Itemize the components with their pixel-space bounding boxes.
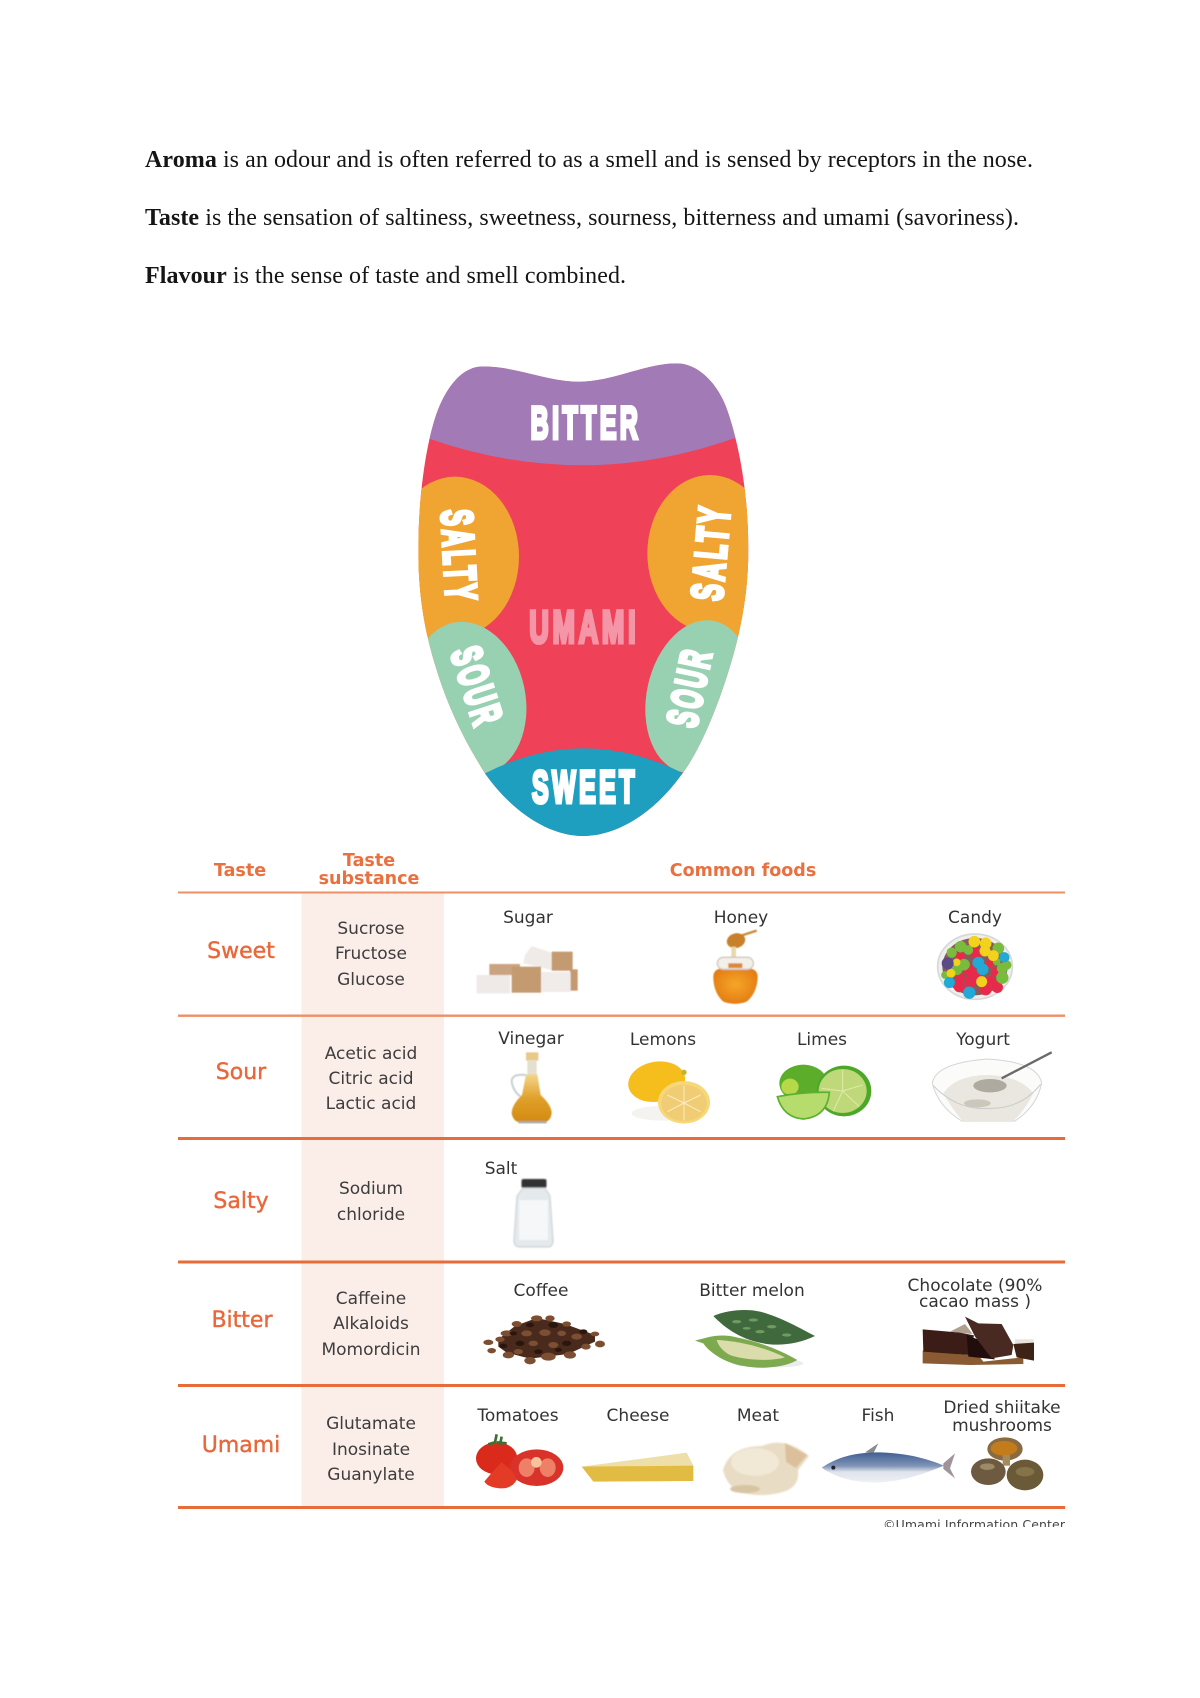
header: taste substance: Taste bbox=[343, 851, 395, 871]
header: common foods: Common foods bbox=[670, 861, 816, 881]
icon: vinegar bottle bbox=[512, 1052, 552, 1123]
label: sour left: SOUR bbox=[441, 641, 512, 734]
icon: meat bbox=[723, 1443, 809, 1495]
substances: sweet: Glucose bbox=[337, 970, 405, 990]
food label: yogurt: Yogurt bbox=[955, 1030, 1010, 1050]
icon: honey jar bbox=[713, 931, 758, 1004]
label: umami: UMAMI bbox=[529, 602, 639, 653]
food label: limes: Limes bbox=[797, 1030, 847, 1050]
food label: chocolate: Chocolate (90% bbox=[908, 1276, 1042, 1296]
row: sour bbox=[216, 1029, 1052, 1124]
substances: sour: Lactic acid bbox=[326, 1094, 416, 1114]
food label: honey: Honey bbox=[714, 908, 768, 928]
source credit: ©Umami Information Center bbox=[883, 1517, 1066, 1532]
substances: salty: Sodium bbox=[339, 1179, 403, 1199]
icon: salt shaker bbox=[514, 1179, 553, 1247]
label: bitter: BITTER bbox=[531, 398, 641, 449]
substances: sour: Acetic acid bbox=[325, 1044, 417, 1064]
food label: chocolate: cacao mass ) bbox=[919, 1292, 1031, 1312]
header: taste: Taste bbox=[214, 861, 266, 881]
substances: umami: Glutamate bbox=[326, 1414, 416, 1434]
food label: candy: Candy bbox=[948, 908, 1002, 928]
icon: bitter melon bbox=[695, 1310, 815, 1368]
icon: limes bbox=[777, 1065, 871, 1119]
row: sweet bbox=[207, 908, 1012, 1004]
food label: meat: Meat bbox=[737, 1406, 779, 1426]
icon: sugar cubes bbox=[477, 946, 578, 993]
label: salty right: SALTY bbox=[683, 502, 740, 602]
tongue map diagram bbox=[418, 363, 748, 836]
food label: vinegar: Vinegar bbox=[498, 1029, 564, 1049]
food label: salt: Salt bbox=[485, 1159, 518, 1179]
panel: definitions bbox=[145, 147, 1033, 289]
row label: bitter: Bitter bbox=[211, 1308, 273, 1333]
row label: salty: Salty bbox=[213, 1189, 269, 1214]
icon: fish bbox=[822, 1443, 955, 1482]
row label: sour: Sour bbox=[216, 1060, 267, 1085]
text: aroma definition: Aroma is an odour and is often referred to as a smell and is sensed by receptors in the nose. bbox=[145, 147, 1033, 173]
icon: coffee beans bbox=[483, 1315, 605, 1364]
substances: sweet: Sucrose bbox=[337, 919, 405, 939]
food label: bitter melon: Bitter melon bbox=[699, 1281, 805, 1301]
row: umami bbox=[202, 1398, 1061, 1495]
text: flavour definition: Flavour is the sense of taste and smell combined. bbox=[145, 263, 626, 289]
row: bitter bbox=[211, 1276, 1042, 1368]
label: sour right: SOUR bbox=[659, 643, 722, 731]
food label: coffee: Coffee bbox=[514, 1281, 568, 1301]
food label: cheese: Cheese bbox=[607, 1406, 669, 1426]
row label: sweet: Sweet bbox=[207, 939, 275, 964]
food label: tomatoes: Tomatoes bbox=[476, 1406, 559, 1426]
header: taste substance: substance bbox=[319, 869, 419, 889]
substances: bitter: Alkaloids bbox=[333, 1314, 409, 1334]
text: taste definition: Taste is the sensation of saltiness, sweetness, sourness, bitterness and umami (savoriness). bbox=[145, 205, 1019, 231]
row label: umami: Umami bbox=[202, 1433, 280, 1458]
food label: fish: Fish bbox=[862, 1406, 894, 1426]
substances: bitter: Momordicin bbox=[321, 1340, 421, 1360]
food label: sugar: Sugar bbox=[503, 908, 553, 928]
substances: salty: chloride bbox=[337, 1205, 405, 1225]
icon: tomatoes bbox=[476, 1434, 563, 1488]
label: salty left: SALTY bbox=[432, 508, 485, 605]
icon: candy bowl bbox=[938, 934, 1012, 999]
table: tastes, substances and foods bbox=[178, 851, 1066, 1532]
icon: cheese bbox=[582, 1453, 693, 1482]
substances: sour: Citric acid bbox=[328, 1069, 414, 1089]
food label: lemons: Lemons bbox=[630, 1030, 696, 1050]
substances: sweet: Fructose bbox=[335, 944, 407, 964]
substances: umami: Inosinate bbox=[332, 1440, 410, 1460]
row: salty bbox=[213, 1159, 553, 1247]
icon: chocolate bbox=[923, 1317, 1034, 1365]
label: sweet: SWEET bbox=[532, 761, 638, 812]
food label: dried shiitake mushrooms: Dried shiitake bbox=[943, 1398, 1061, 1418]
icon: shiitake mushrooms bbox=[971, 1437, 1043, 1490]
food label: dried shiitake mushrooms: mushrooms bbox=[952, 1416, 1052, 1436]
substances: bitter: Caffeine bbox=[336, 1289, 406, 1309]
substances: umami: Guanylate bbox=[327, 1465, 415, 1485]
icon: lemons bbox=[625, 1057, 710, 1124]
icon: yogurt bowl bbox=[932, 1052, 1052, 1121]
